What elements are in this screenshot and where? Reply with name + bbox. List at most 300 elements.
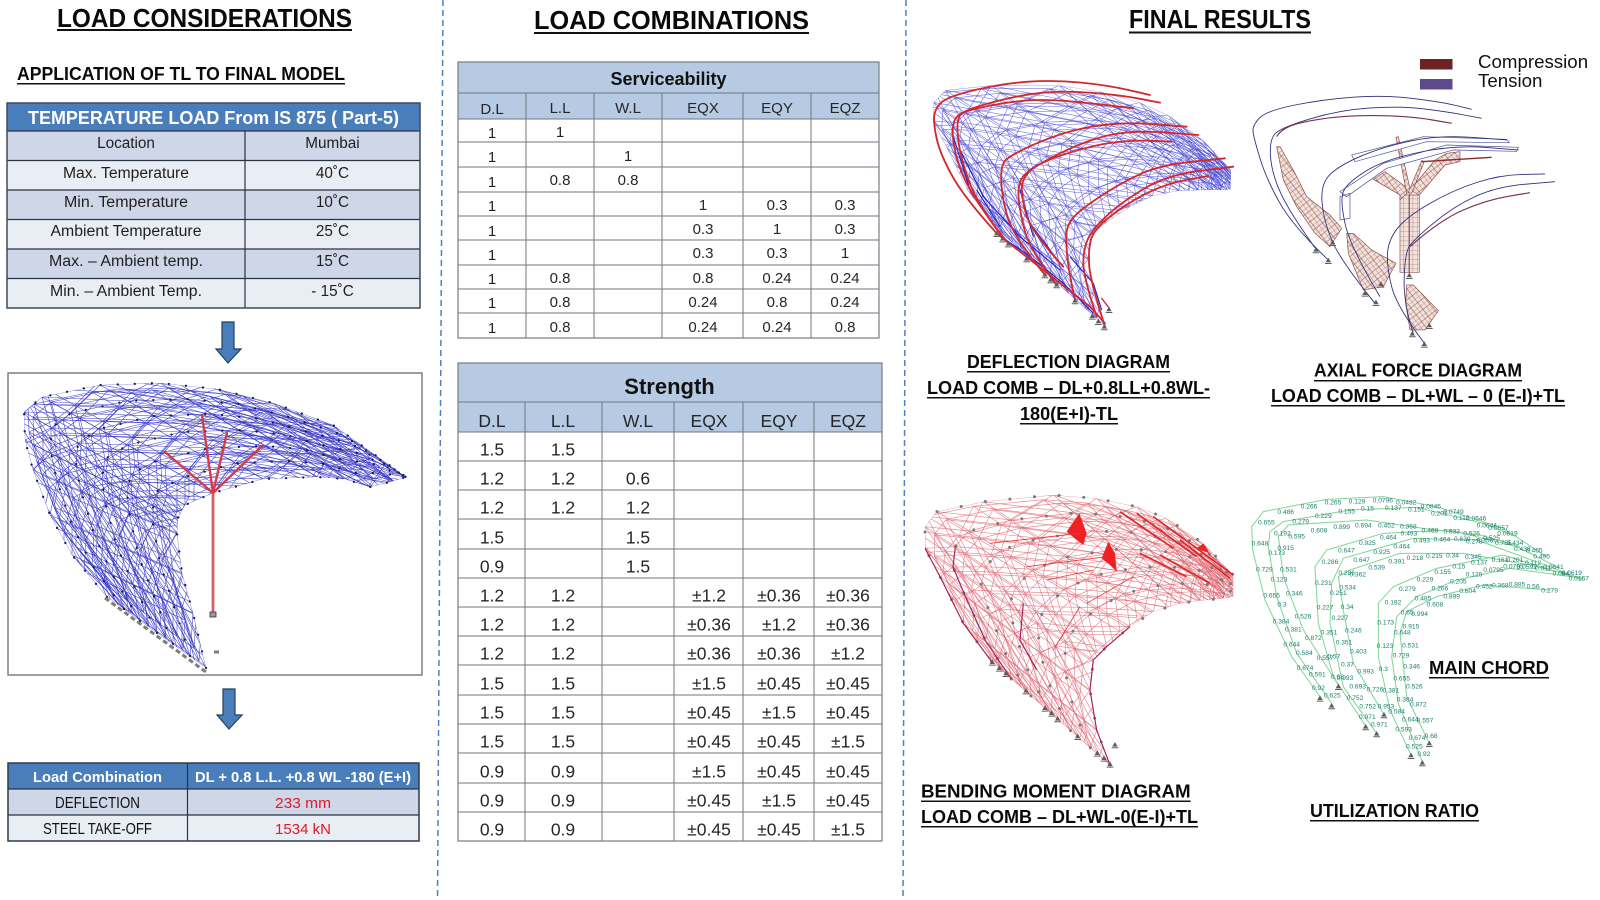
strength rows: 1.2 xyxy=(480,468,504,488)
strength rows: 1.5 xyxy=(551,674,575,694)
serviceability rows: 1 xyxy=(841,245,849,262)
utilization values xyxy=(1252,498,1589,758)
table: temperature load: 10˚C xyxy=(316,194,349,211)
utilization values: 0.0795 xyxy=(1503,563,1524,570)
utilization values: 0.994 xyxy=(1411,611,1428,618)
bending mesh xyxy=(915,495,1243,773)
strength rows: 1.5 xyxy=(551,732,575,752)
table: temperature load: - 15˚C xyxy=(311,283,354,300)
utilization values: 0.633 xyxy=(1443,528,1460,535)
utilization values: 0.192 xyxy=(1385,599,1402,606)
serviceability rows: 1 xyxy=(773,221,781,238)
utilization values: 0.129 xyxy=(1349,498,1366,505)
utilization values: 0.215 xyxy=(1426,553,1443,560)
utilization values: 0.465 xyxy=(1526,547,1543,554)
utilization values: 0.755 xyxy=(1495,540,1512,547)
utilization values: 0.729 xyxy=(1256,566,1273,573)
strength header row: W.L xyxy=(623,411,653,431)
utilization values: 0.584 xyxy=(1388,708,1405,715)
utilization values: 0.381 xyxy=(1383,687,1400,694)
utilization values: 0.279 xyxy=(1541,587,1558,594)
strength rows: ±0.45 xyxy=(687,732,731,752)
serviceability rows: 0.8 xyxy=(550,172,570,189)
strength rows: 1.5 xyxy=(480,528,504,548)
utilization values: 0.346 xyxy=(1286,590,1303,597)
serviceability rows: 0.3 xyxy=(835,221,855,238)
utilization values: 0.112 xyxy=(1525,560,1541,567)
strength rows: ±0.45 xyxy=(826,790,870,810)
serviceability rows: 1 xyxy=(488,271,496,288)
strength rows: ±1.2 xyxy=(762,614,796,634)
utilization values: 0.655 xyxy=(1263,593,1280,600)
serviceability rows: 1 xyxy=(488,223,496,240)
utilization values: 0.0845 xyxy=(1421,503,1441,510)
strength rows: 1.2 xyxy=(480,498,504,518)
table: temperature load: 40˚C xyxy=(316,165,349,182)
utilization values: 0.65 xyxy=(1401,610,1414,617)
utilization values: 0.584 xyxy=(1296,650,1313,657)
utilization values: 0.57 xyxy=(1327,653,1341,660)
serviceability rows: 0.8 xyxy=(550,319,570,336)
utilization values: 0.644 xyxy=(1283,642,1300,649)
serviceability rows: 1 xyxy=(488,198,496,215)
strength rows: 0.9 xyxy=(551,762,575,782)
divider: right xyxy=(903,0,906,900)
utilization values: 0.266 xyxy=(1432,585,1449,592)
utilization values: 0.286 xyxy=(1322,559,1339,566)
utilization values: 0.526 xyxy=(1295,613,1312,620)
utilization values: 0.953 xyxy=(1378,703,1395,710)
utilization values: 0.644 xyxy=(1402,717,1419,724)
strength header row: D.L xyxy=(478,411,506,431)
utilization values: 0.229 xyxy=(1315,513,1332,520)
axial supports xyxy=(1313,240,1433,348)
strength rows: ±0.45 xyxy=(757,732,801,752)
deflected chords xyxy=(934,81,1233,327)
table: temperature load: Min. Temperature xyxy=(64,194,188,211)
strength rows: ±0.36 xyxy=(757,586,801,606)
strength rows: 1.2 xyxy=(551,468,575,488)
strength rows: ±0.45 xyxy=(687,702,731,722)
strength title: Strength xyxy=(624,374,715,399)
utilization values: 0.639 xyxy=(1454,536,1471,543)
utilization values: 0.356 xyxy=(1477,538,1494,545)
utilization values: 0.246 xyxy=(1345,627,1362,634)
heading: load combinations: LOAD COMBINATIONS xyxy=(534,5,809,35)
table: temperature load: Location xyxy=(97,135,155,152)
utilization values: 0.123 xyxy=(1271,577,1288,584)
strength rows: 0.6 xyxy=(626,468,650,488)
strength rows: ±0.45 xyxy=(757,674,801,694)
utilization values: 0.452 xyxy=(1476,583,1493,590)
mesh nodes xyxy=(24,383,406,668)
utilization values: 0.351 xyxy=(1336,639,1353,646)
utilization values: 0.486 xyxy=(1277,509,1294,516)
strength rows xyxy=(480,440,870,840)
strength rows: 1.5 xyxy=(551,702,575,722)
utilization values: 0.885 xyxy=(1509,582,1526,589)
legend: compression and tension: Compression xyxy=(1478,51,1588,72)
utilization values: 0.68 xyxy=(1425,733,1438,740)
utilization values: 0.647 xyxy=(1353,557,1370,564)
utilization values: 0.346 xyxy=(1403,664,1420,671)
utilization values: 0.68 xyxy=(1331,674,1344,681)
legend: compression and tension xyxy=(1420,51,1588,91)
utilization values: 0.227 xyxy=(1317,604,1334,611)
strength rows: ±0.36 xyxy=(826,614,870,634)
utilization values: 0.531 xyxy=(1402,642,1419,649)
serviceability rows: 0.8 xyxy=(550,294,570,311)
utilization values: 0.495 xyxy=(1533,553,1550,560)
utilization values: 0.655 xyxy=(1393,676,1410,683)
caption: deflection diagram xyxy=(927,352,1210,424)
serviceability header row: EQZ xyxy=(830,100,860,117)
utilization values: 0.464 xyxy=(1434,537,1451,544)
table: temperature load: Max. Temperature xyxy=(63,165,189,182)
caption: axial force diagram xyxy=(1271,360,1565,406)
strength header row: L.L xyxy=(551,411,575,431)
utilization values: 0.251 xyxy=(1330,590,1347,597)
utilization values: 0.925 xyxy=(1359,540,1376,547)
tension boxes xyxy=(1340,137,1518,220)
utilization values: 0.608 xyxy=(1311,528,1328,535)
strength rows: ±0.45 xyxy=(687,820,731,840)
utilization values: 0.452 xyxy=(1378,522,1395,529)
panel: structural model xyxy=(8,373,422,675)
utilization values: 0.647 xyxy=(1338,548,1355,555)
serviceability rows: 0.3 xyxy=(693,245,713,262)
utilization values: 0.993 xyxy=(1357,668,1374,675)
utilization values: 0.648 xyxy=(1394,629,1411,636)
serviceability rows: 1 xyxy=(624,148,632,165)
utilization values: 0.218 xyxy=(1407,555,1424,562)
legend: compression and tension: Tension xyxy=(1478,70,1542,91)
utilization values: 0.752 xyxy=(1347,695,1364,702)
strength rows: 0.9 xyxy=(480,556,504,576)
utilization values: 0.525 xyxy=(1483,535,1500,542)
strength rows: 1.5 xyxy=(480,674,504,694)
utilization values: 0.625 xyxy=(1324,692,1341,699)
utilization values: 0.0644 xyxy=(1477,522,1497,529)
utilization values: 0.011 xyxy=(1535,566,1551,573)
wall bracing xyxy=(953,137,1102,313)
utilization values: 0.266 xyxy=(1301,503,1318,510)
serviceability rows: 0.8 xyxy=(835,319,855,336)
utilization values: 0.899 xyxy=(1333,524,1350,531)
result table text xyxy=(33,769,411,838)
utilization values: 0.345 xyxy=(1465,554,1482,561)
chord lines xyxy=(1253,96,1555,344)
strength rows: 1.5 xyxy=(551,440,575,460)
utilization values: 0.137 xyxy=(1385,505,1402,512)
table: temperature load: 15˚C xyxy=(316,253,349,270)
serviceability rows: 1 xyxy=(488,149,496,166)
strength rows: 1.5 xyxy=(480,732,504,752)
strength rows: 0.9 xyxy=(480,820,504,840)
serviceability rows: 0.24 xyxy=(688,319,718,336)
strength rows: 1.2 xyxy=(480,614,504,634)
utilization values: 0.438 xyxy=(1514,546,1531,553)
utilization values: 0.362 xyxy=(1349,572,1366,579)
heading: load considerations: LOAD CONSIDERATIONS xyxy=(57,3,352,33)
utilization values: 0.0657 xyxy=(1488,525,1509,532)
utilization values: 0.3 xyxy=(1379,666,1388,673)
strength rows: ±0.36 xyxy=(757,644,801,664)
utilization values: 0.899 xyxy=(1443,593,1460,600)
strength rows: 0.9 xyxy=(551,820,575,840)
serviceability header row: EQX xyxy=(687,100,719,117)
caption: deflection diagram: LOAD COMB – DL+0.8LL+0.8WL- xyxy=(927,378,1210,398)
utilization values: 0.993 xyxy=(1337,675,1354,682)
serviceability rows: 0.24 xyxy=(830,270,860,287)
red tree column xyxy=(165,415,262,617)
strength rows: ±0.45 xyxy=(687,790,731,810)
caption: axial force diagram: AXIAL FORCE DIAGRAM xyxy=(1314,360,1522,380)
utilization values: 0.384 xyxy=(1273,618,1290,625)
utilization values: 0.201 xyxy=(1431,510,1448,517)
utilization values: 0.557 xyxy=(1417,718,1434,725)
utilization values: 0.403 xyxy=(1350,648,1367,655)
serviceability rows: 0.8 xyxy=(618,172,638,189)
utilization values: 0.593 xyxy=(1395,727,1412,734)
utilization values: 0.92 xyxy=(1312,685,1325,692)
utilization values: 0.34 xyxy=(1341,604,1354,611)
strength rows: 1.2 xyxy=(480,644,504,664)
serviceability rows: 0.8 xyxy=(550,270,570,287)
heading: application of TL to final model: APPLICATION OF TL TO FINAL MODEL xyxy=(17,63,345,84)
utilization values: 0.526 xyxy=(1463,531,1480,538)
utilization values: 0.971 xyxy=(1371,722,1388,729)
strength rows: 1.5 xyxy=(480,440,504,460)
serviceability rows: 0.3 xyxy=(693,221,713,238)
serviceability rows xyxy=(488,124,860,337)
utilization values: 0.0157 xyxy=(1569,576,1589,583)
utilization values: 0.34 xyxy=(1446,553,1459,560)
table: load combination result xyxy=(8,763,419,841)
utilization values: 0.485 xyxy=(1415,596,1432,603)
utilization values: 0.155 xyxy=(1338,508,1355,515)
utilization values: 0.368 xyxy=(1492,582,1509,589)
strength rows: 1.5 xyxy=(480,702,504,722)
serviceability rows: 1 xyxy=(488,125,496,142)
utilization chords xyxy=(1252,497,1583,762)
arrow: down to results xyxy=(217,689,242,729)
utilization values: 0.694 xyxy=(1355,522,1372,529)
utilization values: 0.278 xyxy=(1466,538,1483,545)
strength header row xyxy=(478,411,866,431)
utilization values: 0.0482 xyxy=(1396,500,1417,507)
utilization values: 0.151 xyxy=(1408,507,1425,514)
utilization values: 0.534 xyxy=(1339,584,1356,591)
strength rows: 0.9 xyxy=(480,790,504,810)
utilization values: 0.925 xyxy=(1373,549,1390,556)
strength rows: ±1.5 xyxy=(831,820,865,840)
heading: final results: FINAL RESULTS xyxy=(1129,4,1311,34)
strength rows: 0.9 xyxy=(480,762,504,782)
serviceability header row: D.L xyxy=(480,101,504,118)
utilization values: 0.493 xyxy=(1401,530,1418,537)
utilization values: 0.3 xyxy=(1277,602,1287,609)
utilization values: 0.464 xyxy=(1380,534,1397,541)
caption: deflection diagram: DEFLECTION DIAGRAM xyxy=(967,352,1170,372)
deflection supports xyxy=(993,231,1112,330)
serviceability title: Serviceability xyxy=(610,69,727,89)
strength header row: EQZ xyxy=(830,411,866,431)
strength rows: 1.2 xyxy=(480,586,504,606)
table: temperature load xyxy=(7,103,420,308)
strength rows: ±0.36 xyxy=(687,614,731,634)
utilization values: 0.368 xyxy=(1400,523,1417,530)
utilization values: 0.129 xyxy=(1466,572,1483,579)
utilization values: 0.391 xyxy=(1388,558,1405,565)
strength rows: 1.2 xyxy=(551,614,575,634)
strength rows: 1.2 xyxy=(626,498,650,518)
utilization values: 0.595 xyxy=(1288,533,1305,540)
caption: deflection diagram: 180(E+I)-TL xyxy=(1020,404,1118,424)
utilization values: 0.674 xyxy=(1409,735,1426,742)
utilization values: 0.0796 xyxy=(1373,498,1393,505)
serviceability rows: 1 xyxy=(488,174,496,191)
utilization values: 0.227 xyxy=(1332,615,1349,622)
utilization values: 0.265 xyxy=(1325,500,1342,507)
strength rows: ±1.2 xyxy=(692,586,726,606)
serviceability rows: 0.24 xyxy=(688,294,718,311)
utilization values: 0.229 xyxy=(1417,576,1434,583)
strength header row: EQY xyxy=(761,411,798,431)
utilization values: 0.493 xyxy=(1413,538,1430,545)
utilization values: 0.729 xyxy=(1393,653,1410,660)
caption: bending moment diagram: LOAD COMB – DL+WL-0(E-I)+TL xyxy=(921,807,1198,827)
label: main chord: MAIN CHORD xyxy=(1429,657,1549,678)
serviceability rows: 0.24 xyxy=(830,294,860,311)
supports xyxy=(105,598,220,672)
table header: TEMPERATURE LOAD From IS 875 ( Part-5) xyxy=(28,107,399,128)
serviceability rows: 1 xyxy=(699,197,707,214)
utilization values: 0.15 xyxy=(1361,506,1374,513)
utilization values: 0.468 xyxy=(1422,527,1439,534)
serviceability rows: 1 xyxy=(556,124,564,141)
utilization values: 0.0592 xyxy=(1517,564,1537,571)
strength rows: 1.2 xyxy=(551,498,575,518)
deflection mesh xyxy=(916,74,1243,345)
table: strength xyxy=(458,363,882,841)
utilization values: 0.915 xyxy=(1277,545,1294,552)
utilization values: 0.604 xyxy=(1459,588,1476,595)
utilization values: 0.173 xyxy=(1268,550,1285,557)
table: temperature load: 25˚C xyxy=(316,223,349,240)
utilization values: 0.92 xyxy=(1417,751,1431,758)
result table text: DL + 0.8 L.L. +0.8 WL -180 (E+I) xyxy=(195,769,411,786)
utilization values: 0.872 xyxy=(1410,702,1427,709)
strength rows: ±1.5 xyxy=(762,790,796,810)
result table text: 1534 kN xyxy=(275,821,331,838)
utilization values: 0.15 xyxy=(1452,563,1466,570)
strength rows: ±0.36 xyxy=(687,644,731,664)
serviceability rows: 0.3 xyxy=(835,197,855,214)
result table text: DEFLECTION xyxy=(55,795,140,812)
chart: axial force diagram xyxy=(1253,96,1555,348)
utilization values: 0.137 xyxy=(1471,559,1488,566)
compression hatching xyxy=(1277,137,1460,330)
serviceability rows: 0.8 xyxy=(767,294,787,311)
serviceability rows: 0.8 xyxy=(693,270,713,287)
serviceability rows: 0.3 xyxy=(767,245,787,262)
utilization values: 0.726 xyxy=(1367,687,1384,694)
utilization values: 0.279 xyxy=(1292,518,1309,525)
serviceability header row xyxy=(480,100,860,118)
utilization values: 0.173 xyxy=(1377,619,1394,626)
result table text: 233 mm xyxy=(275,795,331,812)
utilization values: 0.205 xyxy=(1450,578,1467,585)
utilization values: 0.084 xyxy=(1553,570,1570,577)
caption: bending moment diagram: BENDING MOMENT DIAGRAM xyxy=(921,782,1191,802)
strength rows: ±0.45 xyxy=(826,702,870,722)
bending supports xyxy=(989,659,1118,768)
divider: left xyxy=(438,0,443,900)
strength rows: ±0.36 xyxy=(826,586,870,606)
strength rows: 0.9 xyxy=(551,790,575,810)
utilization values: 0.915 xyxy=(1403,624,1420,631)
table: temperature load: Max. – Ambient temp. xyxy=(49,253,203,270)
utilization values: 0.161 xyxy=(1492,557,1509,564)
utilization values: 0.384 xyxy=(1397,696,1414,703)
chart: bending moment diagram xyxy=(915,495,1243,773)
result table text: STEEL TAKE-OFF xyxy=(43,821,152,838)
bending moment peaks xyxy=(925,512,1233,768)
utilization values: 0.752 xyxy=(1359,703,1376,710)
strength rows: 1.5 xyxy=(626,556,650,576)
strength header row: EQX xyxy=(691,411,728,431)
utilization values: 0.0795 xyxy=(1483,567,1504,574)
strength rows: ±1.2 xyxy=(831,644,865,664)
wireframe roof mesh xyxy=(16,375,415,675)
serviceability rows: 1 xyxy=(488,295,496,312)
utilization values: 0.381 xyxy=(1285,626,1302,633)
utilization values: 0.464 xyxy=(1393,543,1410,550)
strength rows: ±0.45 xyxy=(757,820,801,840)
serviceability rows: 1 xyxy=(488,247,496,264)
chart: deflection diagram xyxy=(916,74,1243,345)
utilization values: 0.123 xyxy=(1377,643,1394,650)
utilization values: 0.231 xyxy=(1315,580,1332,587)
utilization values: 0.286 xyxy=(1338,570,1355,577)
caption: axial force diagram: LOAD COMB – DL+WL – 0 (E-I)+TL xyxy=(1271,386,1565,406)
utilization values: 0.0641 xyxy=(1543,564,1564,571)
chart: utilization ratio xyxy=(1252,497,1589,766)
strength rows: ±1.5 xyxy=(762,702,796,722)
utilization values: 0.37 xyxy=(1341,662,1354,669)
serviceability rows: 0.24 xyxy=(762,270,792,287)
utilization values: 0.525 xyxy=(1406,744,1423,751)
utilization values: 0.279 xyxy=(1399,586,1416,593)
utilization values: 0.0619 xyxy=(1562,570,1582,577)
utilization values: 0.434 xyxy=(1507,540,1524,547)
table: temperature load: Mumbai xyxy=(305,135,360,152)
utilization values: 0.112 xyxy=(1453,515,1470,522)
utilization values: 0.56 xyxy=(1527,584,1540,591)
strength rows: 1.5 xyxy=(626,528,650,548)
serviceability rows: 1 xyxy=(488,320,496,337)
strength rows: ±0.45 xyxy=(826,674,870,694)
result table text: Load Combination xyxy=(33,769,162,786)
serviceability rows: 0.24 xyxy=(762,319,792,336)
utilization values: 0.693 xyxy=(1349,683,1366,690)
utilization values: 0.201 xyxy=(1507,557,1524,564)
utilization supports xyxy=(1317,684,1433,766)
utilization values: 0.557 xyxy=(1317,655,1334,662)
strength rows: 1.2 xyxy=(551,644,575,664)
utilization values: 0.872 xyxy=(1305,635,1322,642)
